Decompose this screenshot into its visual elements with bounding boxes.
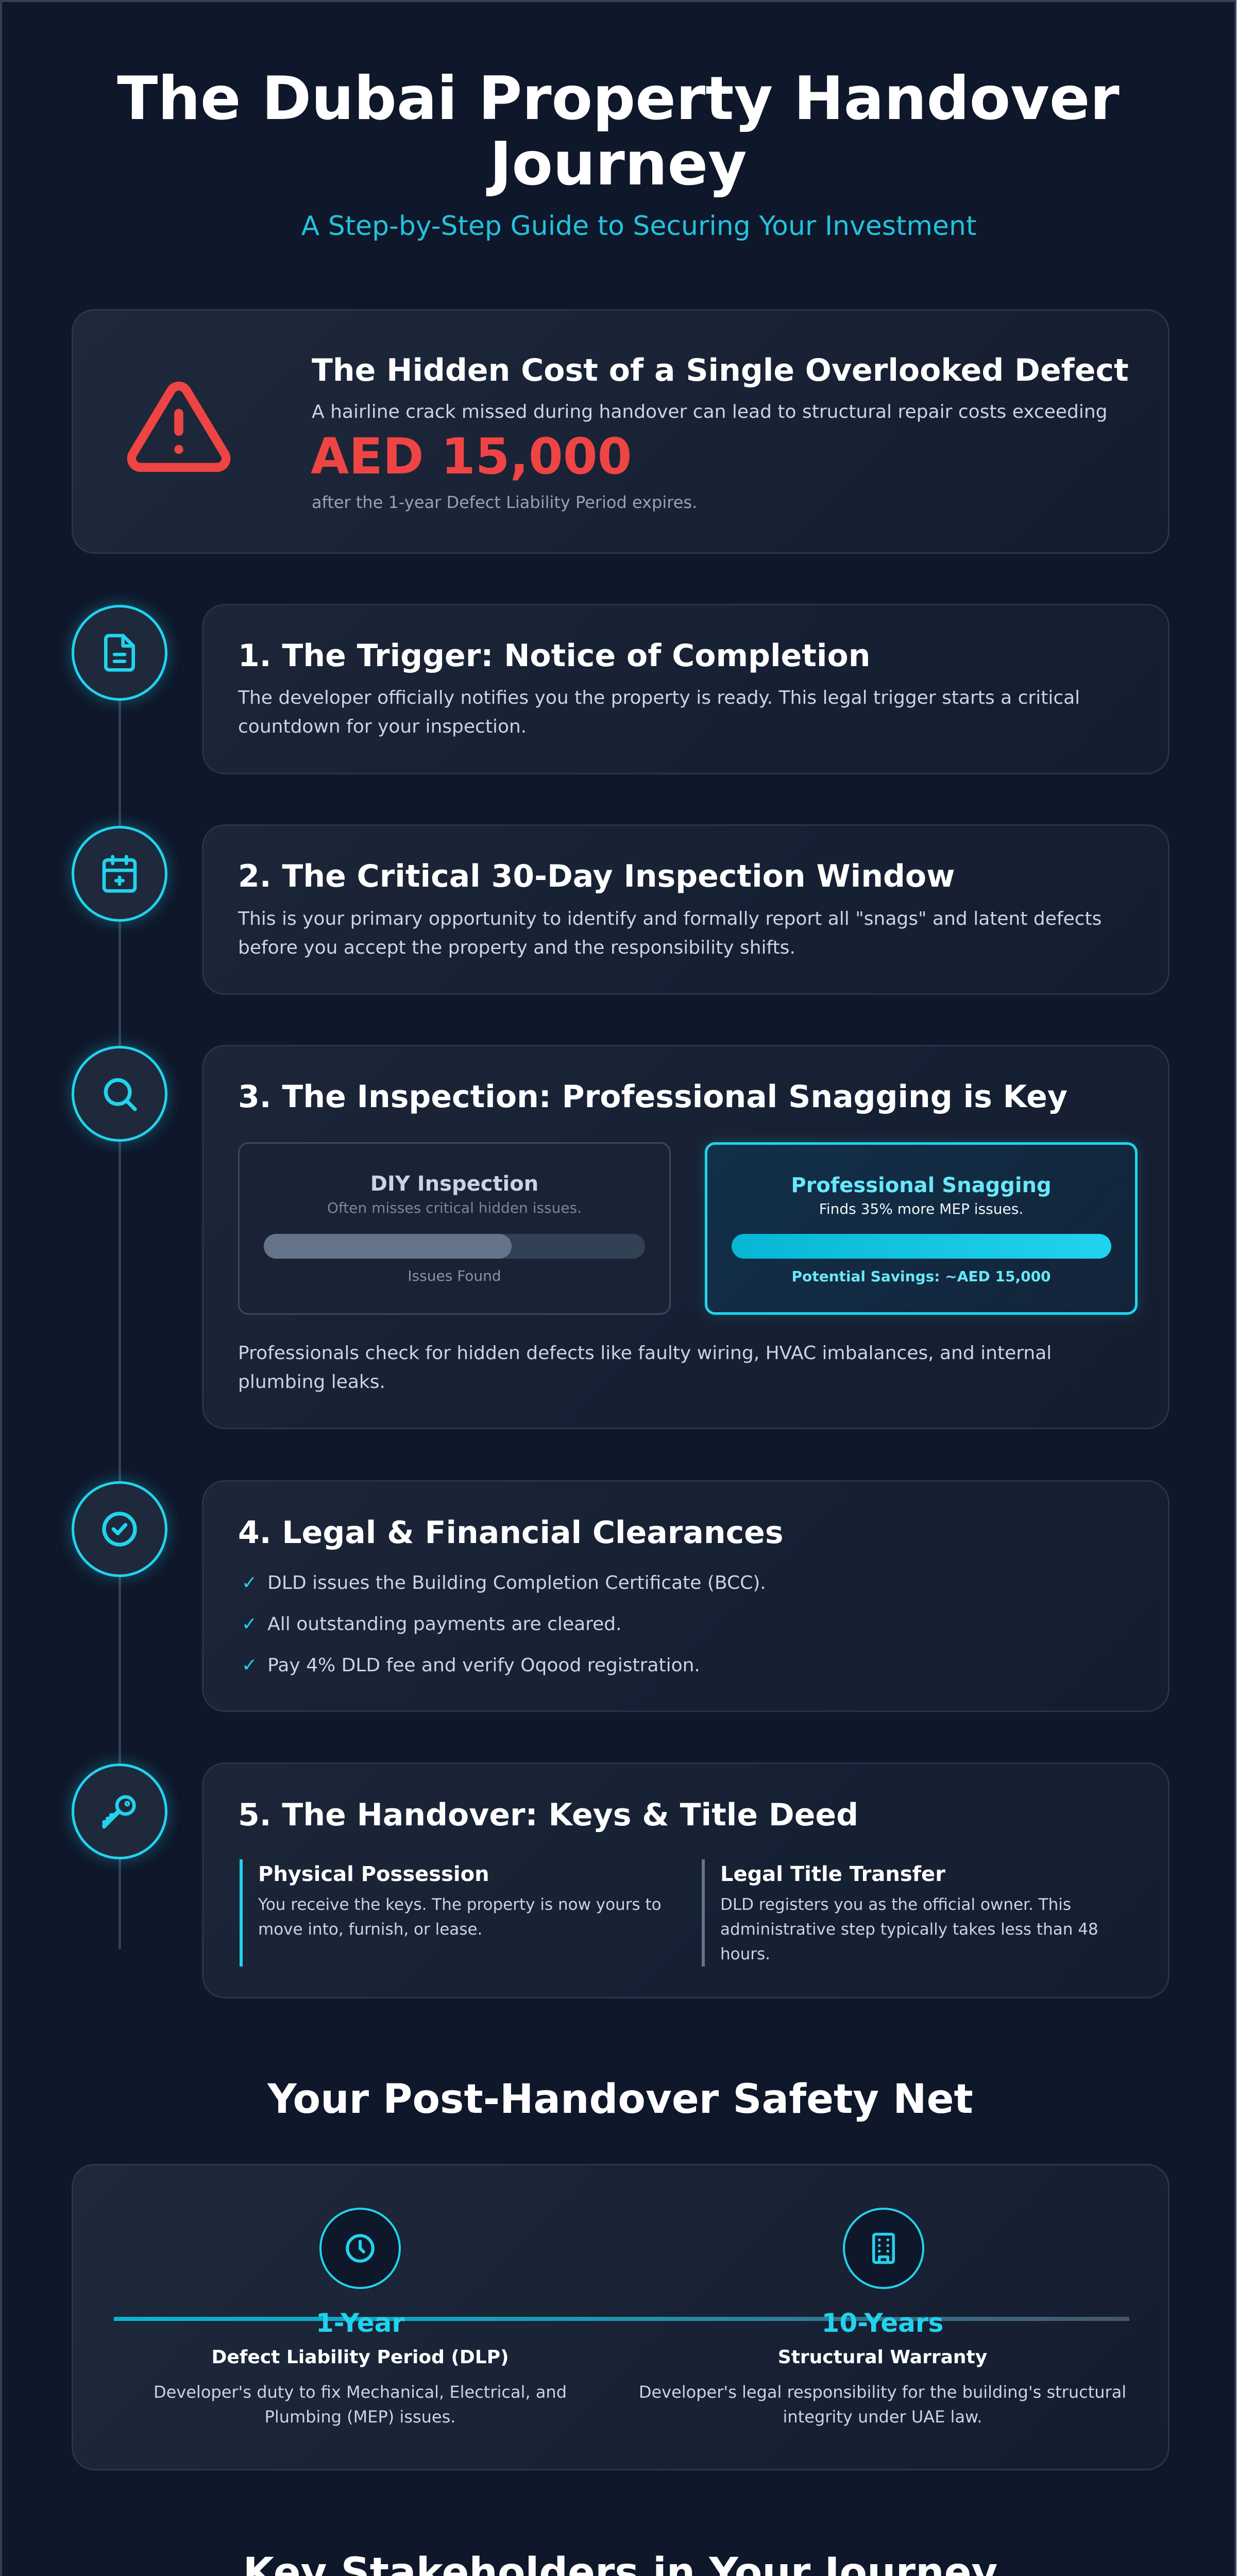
savings: Potential Savings: ~AED 15,000 (791, 1268, 1051, 1285)
step 3 title: 3. The Inspection: Professional Snagging is Key (238, 1079, 1067, 1115)
panel: step 3 (202, 1045, 1170, 1429)
step 1 text: The developer officially notifies you the property is ready. This legal trigger starts a critical countdown for your inspection. (238, 687, 1080, 737)
checklist (242, 1572, 766, 1676)
column: 10-year warranty: integrity under UAE law. (783, 2407, 982, 2427)
step 2 text: This is your primary opportunity to identify and formally report all "snags" and latent defects before you accept the property and the responsibility shifts. (238, 908, 1102, 958)
step 2 title: 2. The Critical 30-Day Inspection Window (238, 858, 955, 894)
column: physical possession: Physical Possession (258, 1862, 489, 1886)
panel: safety net (72, 2164, 1170, 2470)
step 3 text: Professionals check for hidden defects like faulty wiring, HVAC imbalances, and internal plumbing leaks. (238, 1343, 1052, 1393)
cost figure: AED 15,000 (311, 428, 632, 485)
checklist: ✓ All outstanding payments are cleared. (242, 1614, 622, 1635)
comparison: professional (705, 1142, 1138, 1315)
pro sub: Finds 35% more MEP issues. (819, 1200, 1023, 1217)
timeline line (118, 653, 121, 1949)
icon: building (843, 2208, 924, 2289)
step 5 title: 5. The Handover: Keys & Title Deed (238, 1797, 858, 1833)
subtitle: A Step-by-Step Guide to Securing Your Investment (301, 211, 976, 242)
panel: step 4 (202, 1480, 1170, 1712)
icon: warning triangle (127, 381, 231, 472)
panel: step 5 (202, 1762, 1170, 1998)
pro bar (732, 1234, 1111, 1259)
DIY sub: Often misses critical hidden issues. (327, 1199, 582, 1216)
column: legal title transfer: Legal Title Transfer (720, 1862, 945, 1886)
title: Journey (489, 129, 747, 199)
step 4 title: 4. Legal & Financial Clearances (238, 1515, 784, 1551)
column: 1-year DLP: Developer's duty to fix Mechanical, Electrical, and (154, 2382, 567, 2402)
column: legal title transfer: DLD registers you as the official owner. This administrative step typically takes less than 48 hours. (720, 1895, 1098, 1963)
icon: step 1 document (72, 605, 167, 701)
heading: safety net: Your Post-Handover Safety Net (267, 2076, 973, 2123)
panel: step 1 (202, 604, 1170, 774)
timeline bar (114, 2317, 1129, 2321)
checklist: ✓ Pay 4% DLD fee and verify Oqood registration. (242, 1655, 700, 1676)
column: 10-year warranty (639, 2308, 1126, 2427)
column: 1-year DLP: Plumbing (MEP) issues. (265, 2407, 455, 2427)
panel: hidden cost alert (72, 309, 1170, 554)
icon: step 3 search (72, 1046, 167, 1142)
column: 10-year warranty: Structural Warranty (778, 2347, 987, 2368)
DIY bar (264, 1234, 645, 1259)
pro title: Professional Snagging (791, 1174, 1052, 1197)
icon: step 4 check (72, 1481, 167, 1577)
column: legal title transfer (702, 1859, 1124, 1967)
description: A hairline crack missed during handover can lead to structural repair costs exceeding (312, 401, 1108, 422)
footnote: after the 1-year Defect Liability Period expires. (312, 493, 697, 512)
column: physical possession: You receive the keys. The property is now yours to move into, furnish, or lease. (258, 1895, 662, 1939)
icon: step 2 calendar (72, 826, 167, 922)
icon: clock (319, 2208, 401, 2289)
column: 1-year DLP (154, 2308, 567, 2427)
DIY label: Issues Found (408, 1267, 501, 1284)
step 1 title: 1. The Trigger: Notice of Completion (238, 638, 870, 674)
checklist: ✓ DLD issues the Building Completion Certificate (BCC). (242, 1572, 766, 1594)
column: 10-year warranty: Developer's legal responsibility for the building's structural (639, 2382, 1126, 2402)
title: The Dubai Property Handover (117, 64, 1120, 133)
column: 1-year DLP: Defect Liability Period (DLP) (211, 2347, 509, 2368)
DIY title: DIY Inspection (370, 1172, 538, 1196)
title (117, 64, 1120, 199)
panel: step 2 (202, 824, 1170, 995)
column: 1-year DLP: 1-Year (316, 2308, 404, 2338)
column: 10-year warranty: 10-Years (822, 2308, 943, 2338)
icon: step 5 key (72, 1764, 167, 1859)
heading: The Hidden Cost of a Single Overlooked Defect (312, 352, 1129, 388)
column: physical possession (240, 1859, 688, 1967)
comparison: DIY (238, 1142, 671, 1315)
